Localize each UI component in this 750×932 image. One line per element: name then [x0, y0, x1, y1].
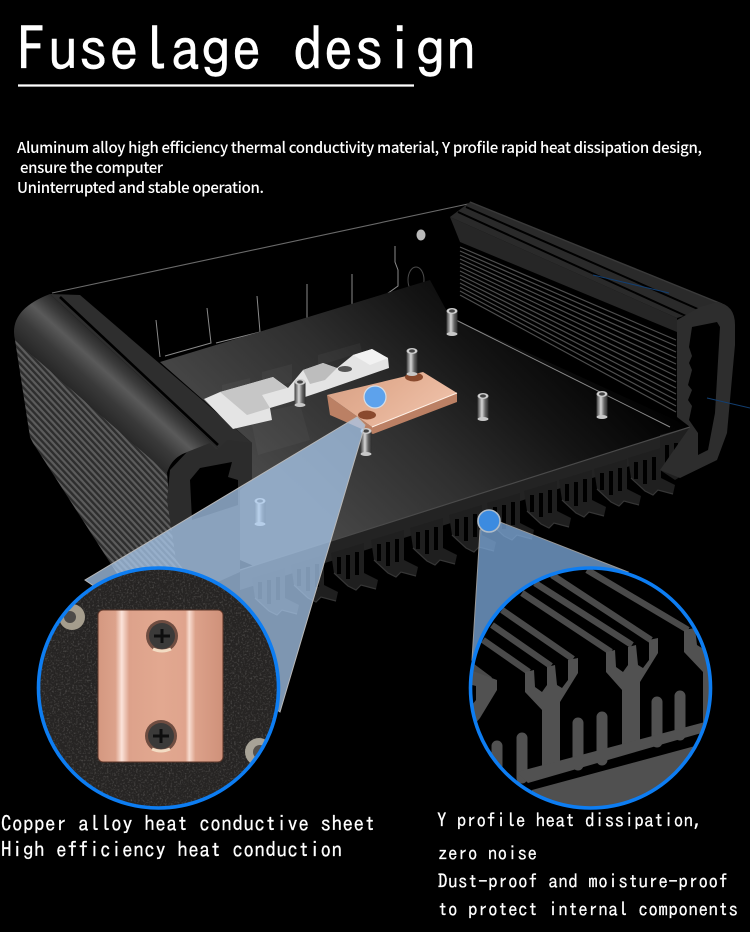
Y fin 2	[606, 638, 658, 753]
right caption	[437, 811, 738, 919]
description text: Uninterrupted and stable operation.	[17, 177, 264, 198]
case bottom fins	[240, 427, 690, 615]
right wall with heat sink	[450, 202, 722, 427]
blue dot: copper plate	[364, 386, 386, 408]
screw top	[146, 620, 178, 652]
title: Fuselage design	[17, 19, 476, 79]
right caption: Dust-proof and moisture-proof	[438, 872, 728, 891]
short fins	[497, 696, 680, 778]
copper plate	[327, 372, 457, 434]
description text	[17, 137, 702, 198]
right magnifier beam	[472, 522, 628, 660]
floor reflections	[222, 343, 362, 455]
left circle: copper sheet close-up	[36, 566, 280, 810]
extruded fin ribs	[470, 570, 688, 680]
right caption: Y profile heat dissipation,	[437, 811, 703, 830]
left caption	[1, 813, 375, 860]
white bracket	[204, 349, 389, 429]
fin base plate	[517, 722, 705, 783]
description text: ensure the computer	[20, 157, 164, 178]
right end profile	[660, 302, 735, 478]
case back wall	[52, 204, 468, 357]
left end profile	[167, 440, 252, 590]
blue dot: fins	[478, 510, 500, 532]
blue streaks	[593, 275, 750, 408]
left curved panel	[14, 294, 220, 473]
case floor	[160, 280, 690, 570]
right caption: zero noise	[438, 844, 537, 863]
Y fin 0	[472, 672, 497, 722]
screw bottom	[145, 720, 177, 752]
left end slot	[190, 462, 238, 520]
right end slot	[688, 322, 720, 455]
description text: Aluminum alloy high efficiency thermal conductivity material, Y profile rapid heat dissipation design,	[17, 137, 702, 158]
Y fin 3	[684, 628, 709, 722]
left top rail	[50, 294, 252, 450]
copper sheet	[98, 610, 223, 762]
left caption: High efficiency heat conduction	[1, 839, 342, 860]
left fin side	[15, 340, 192, 575]
standoffs	[254, 308, 608, 526]
right circle: Y profile fins close-up	[468, 566, 712, 810]
left magnifier beam	[85, 417, 365, 712]
Y fin 1	[525, 658, 578, 773]
corner standoffs	[59, 604, 85, 630]
computer case illustration	[14, 202, 750, 615]
left caption: Copper alloy heat conductive sheet	[1, 813, 375, 834]
right caption: to protect internal components	[438, 900, 738, 919]
